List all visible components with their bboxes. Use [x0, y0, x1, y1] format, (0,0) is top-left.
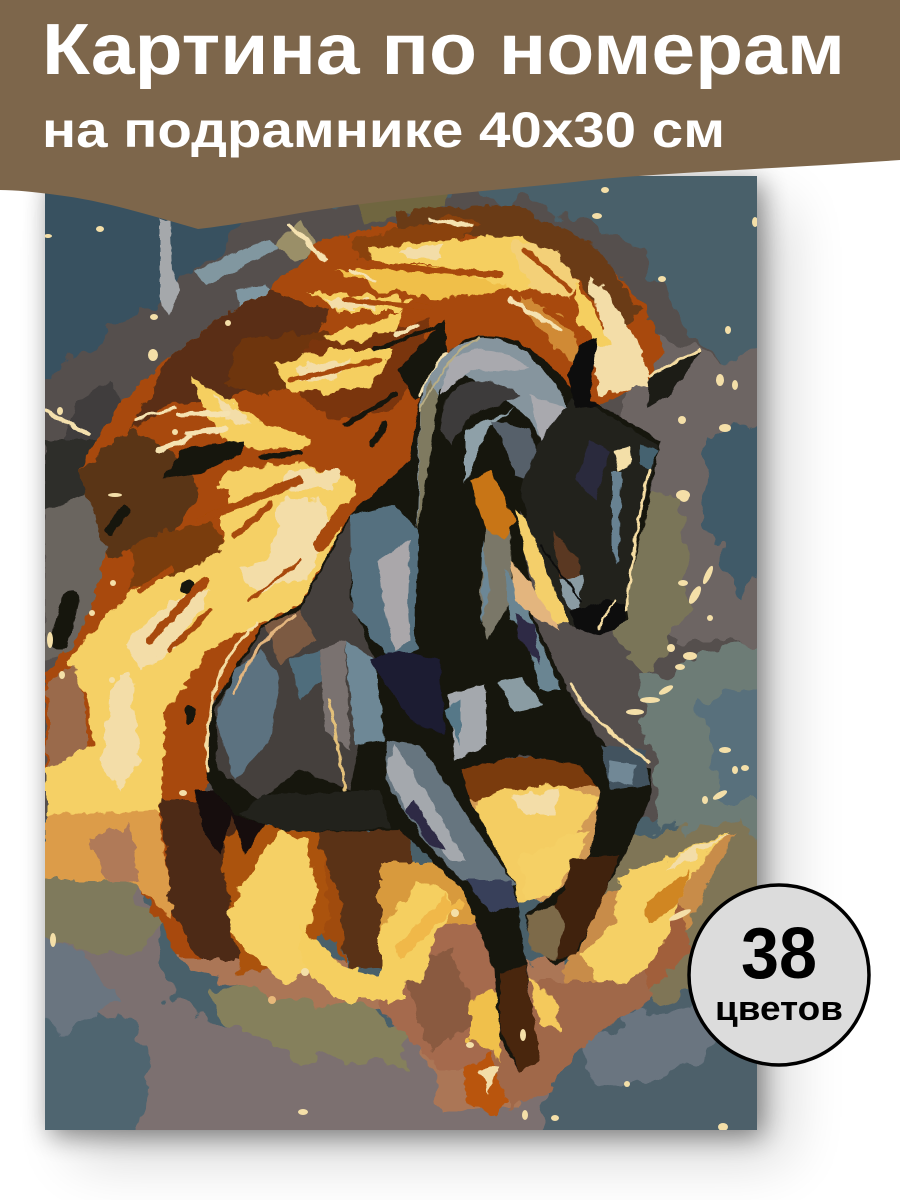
brown header banner [0, 0, 900, 229]
badge: 38 colours: 38 [741, 914, 817, 994]
dark mane gaps [60, 318, 448, 720]
mane and flames: yellow highlights [45, 235, 650, 815]
title: Картина по номерам [42, 10, 845, 90]
badge: 38 colours [689, 885, 869, 1065]
horse: flank and rump [215, 505, 445, 832]
smoke wisps and thread [45, 185, 450, 660]
mane: dark and bright strokes [60, 220, 585, 720]
lower flames: base colours [45, 755, 735, 1110]
cream mane strands [135, 220, 560, 450]
canvas drop shadow [50, 182, 787, 1159]
horse: underbelly warm glow [470, 470, 575, 630]
subtitle: на подрамнике 40х30 см [42, 102, 725, 158]
horse: bright rim light [207, 338, 700, 790]
horse: neck and chest [417, 338, 650, 790]
badge: 38 colours: цветов [715, 990, 843, 1028]
painting: fiery black horse [45, 176, 757, 1130]
horse: head [520, 337, 702, 636]
mane and flames: base colours [45, 205, 665, 960]
painting background [45, 176, 757, 1130]
lower flames: yellow highlights [225, 785, 730, 1115]
horse: hind legs [195, 790, 270, 855]
sparks [44, 187, 758, 1131]
horse: body silhouette [205, 336, 660, 1072]
horse [195, 336, 702, 1072]
horse: hanging foreleg [385, 740, 518, 912]
brown mane strands [140, 250, 585, 650]
